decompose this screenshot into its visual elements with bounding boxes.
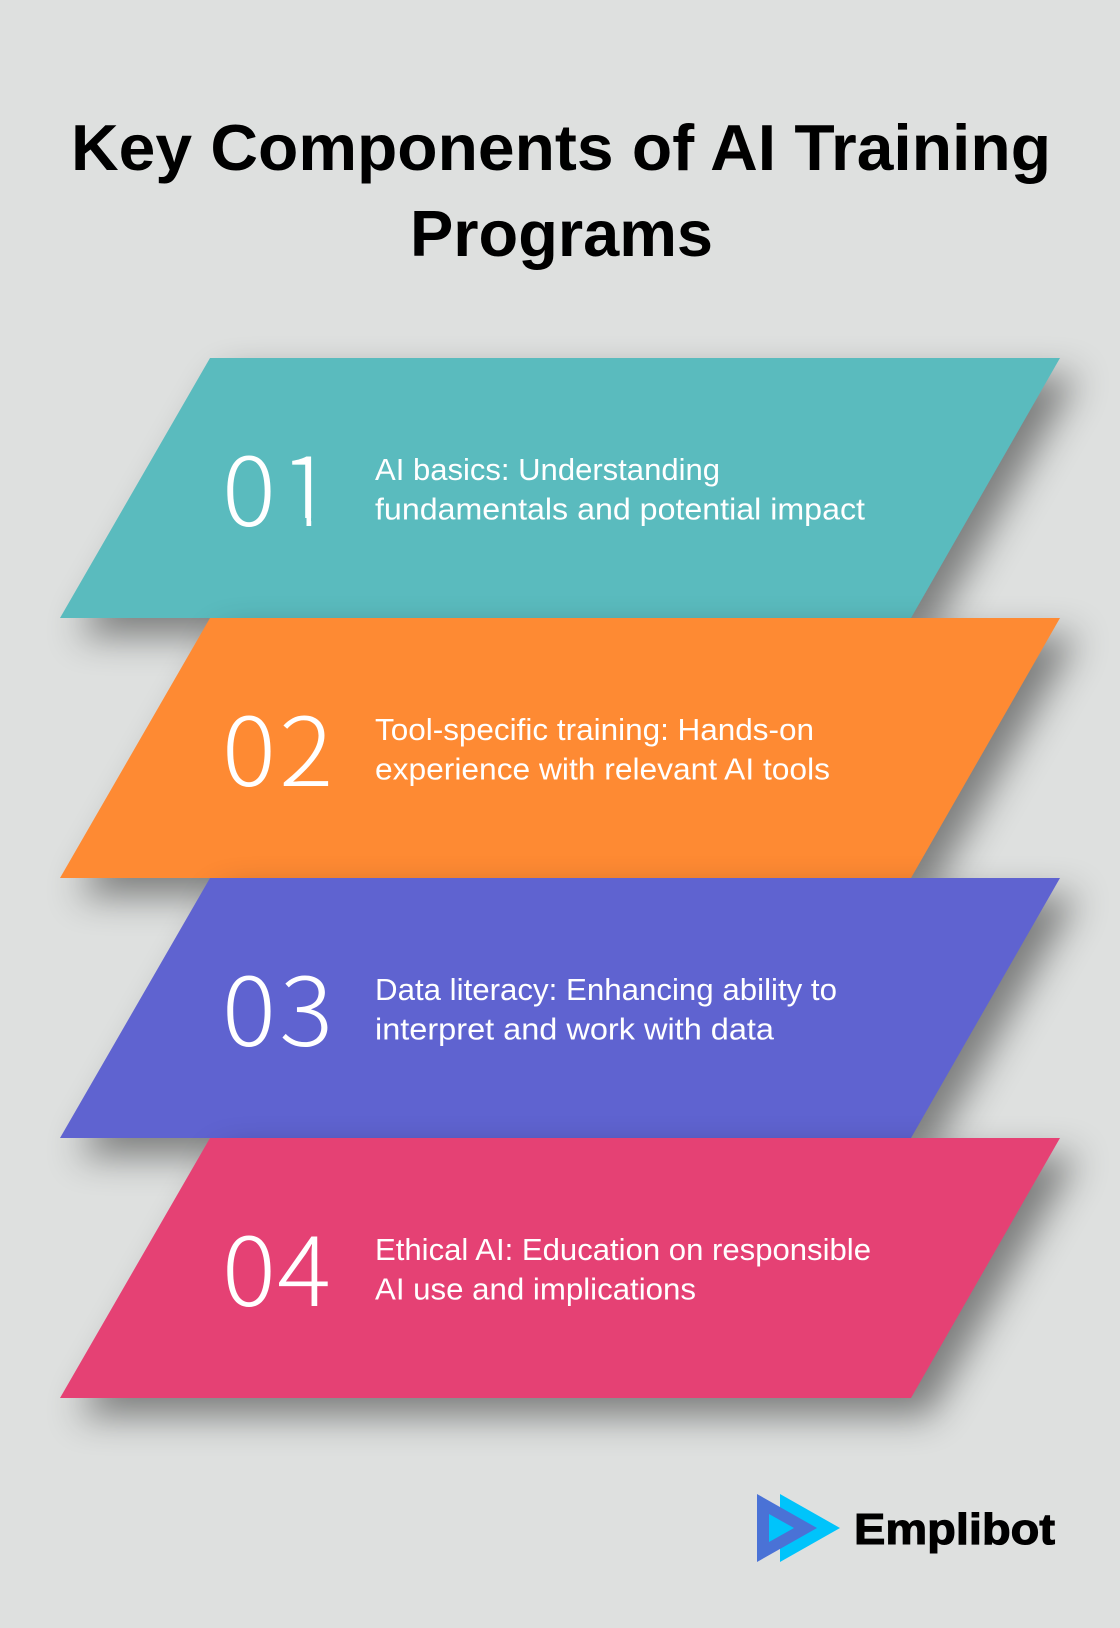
text: AI basics [375, 452, 865, 526]
title: Programs [410, 197, 713, 270]
purple parallelogram [60, 878, 1060, 1138]
text: Tool-specific training: experience with relevant AI tools [375, 752, 830, 786]
text: Data literacy: Data literacy: Enhancing ability to [375, 972, 837, 1007]
icon: play triangles [757, 1494, 840, 1562]
title [71, 111, 1051, 270]
wordmark: Emplibot [854, 1505, 1055, 1554]
text: AI basics: AI basics: Understanding [375, 452, 720, 487]
orange parallelogram [60, 618, 1060, 878]
text: Data literacy [375, 972, 837, 1046]
number 02: 02 [222, 676, 333, 814]
number 04: 04 [222, 1196, 331, 1334]
teal parallelogram [60, 358, 1060, 618]
number 03: 03 [222, 936, 333, 1074]
text: Data literacy: interpret and work with data [375, 1012, 775, 1046]
text: AI basics: fundamentals and potential impact [375, 492, 865, 526]
panel: 04 Ethical AI [60, 1138, 1060, 1398]
text: Tool-specific training: Tool-specific training: Hands-on [375, 712, 814, 747]
panel: 03 Data literacy [60, 878, 1060, 1138]
text: Ethical AI: Ethical AI: Education on responsible [375, 1232, 871, 1267]
pink parallelogram [60, 1138, 1060, 1398]
title: Key Components of AI Training [71, 111, 1051, 184]
panel: 01 AI basics [60, 358, 1060, 618]
logo: Emplibot [757, 1494, 1055, 1562]
panel: 02 Tool-specific training [60, 618, 1060, 878]
text: Tool-specific training [375, 712, 830, 786]
text: Ethical AI [375, 1232, 871, 1306]
text: Ethical AI: AI use and implications [375, 1272, 696, 1306]
number 01: 01 [222, 416, 333, 554]
